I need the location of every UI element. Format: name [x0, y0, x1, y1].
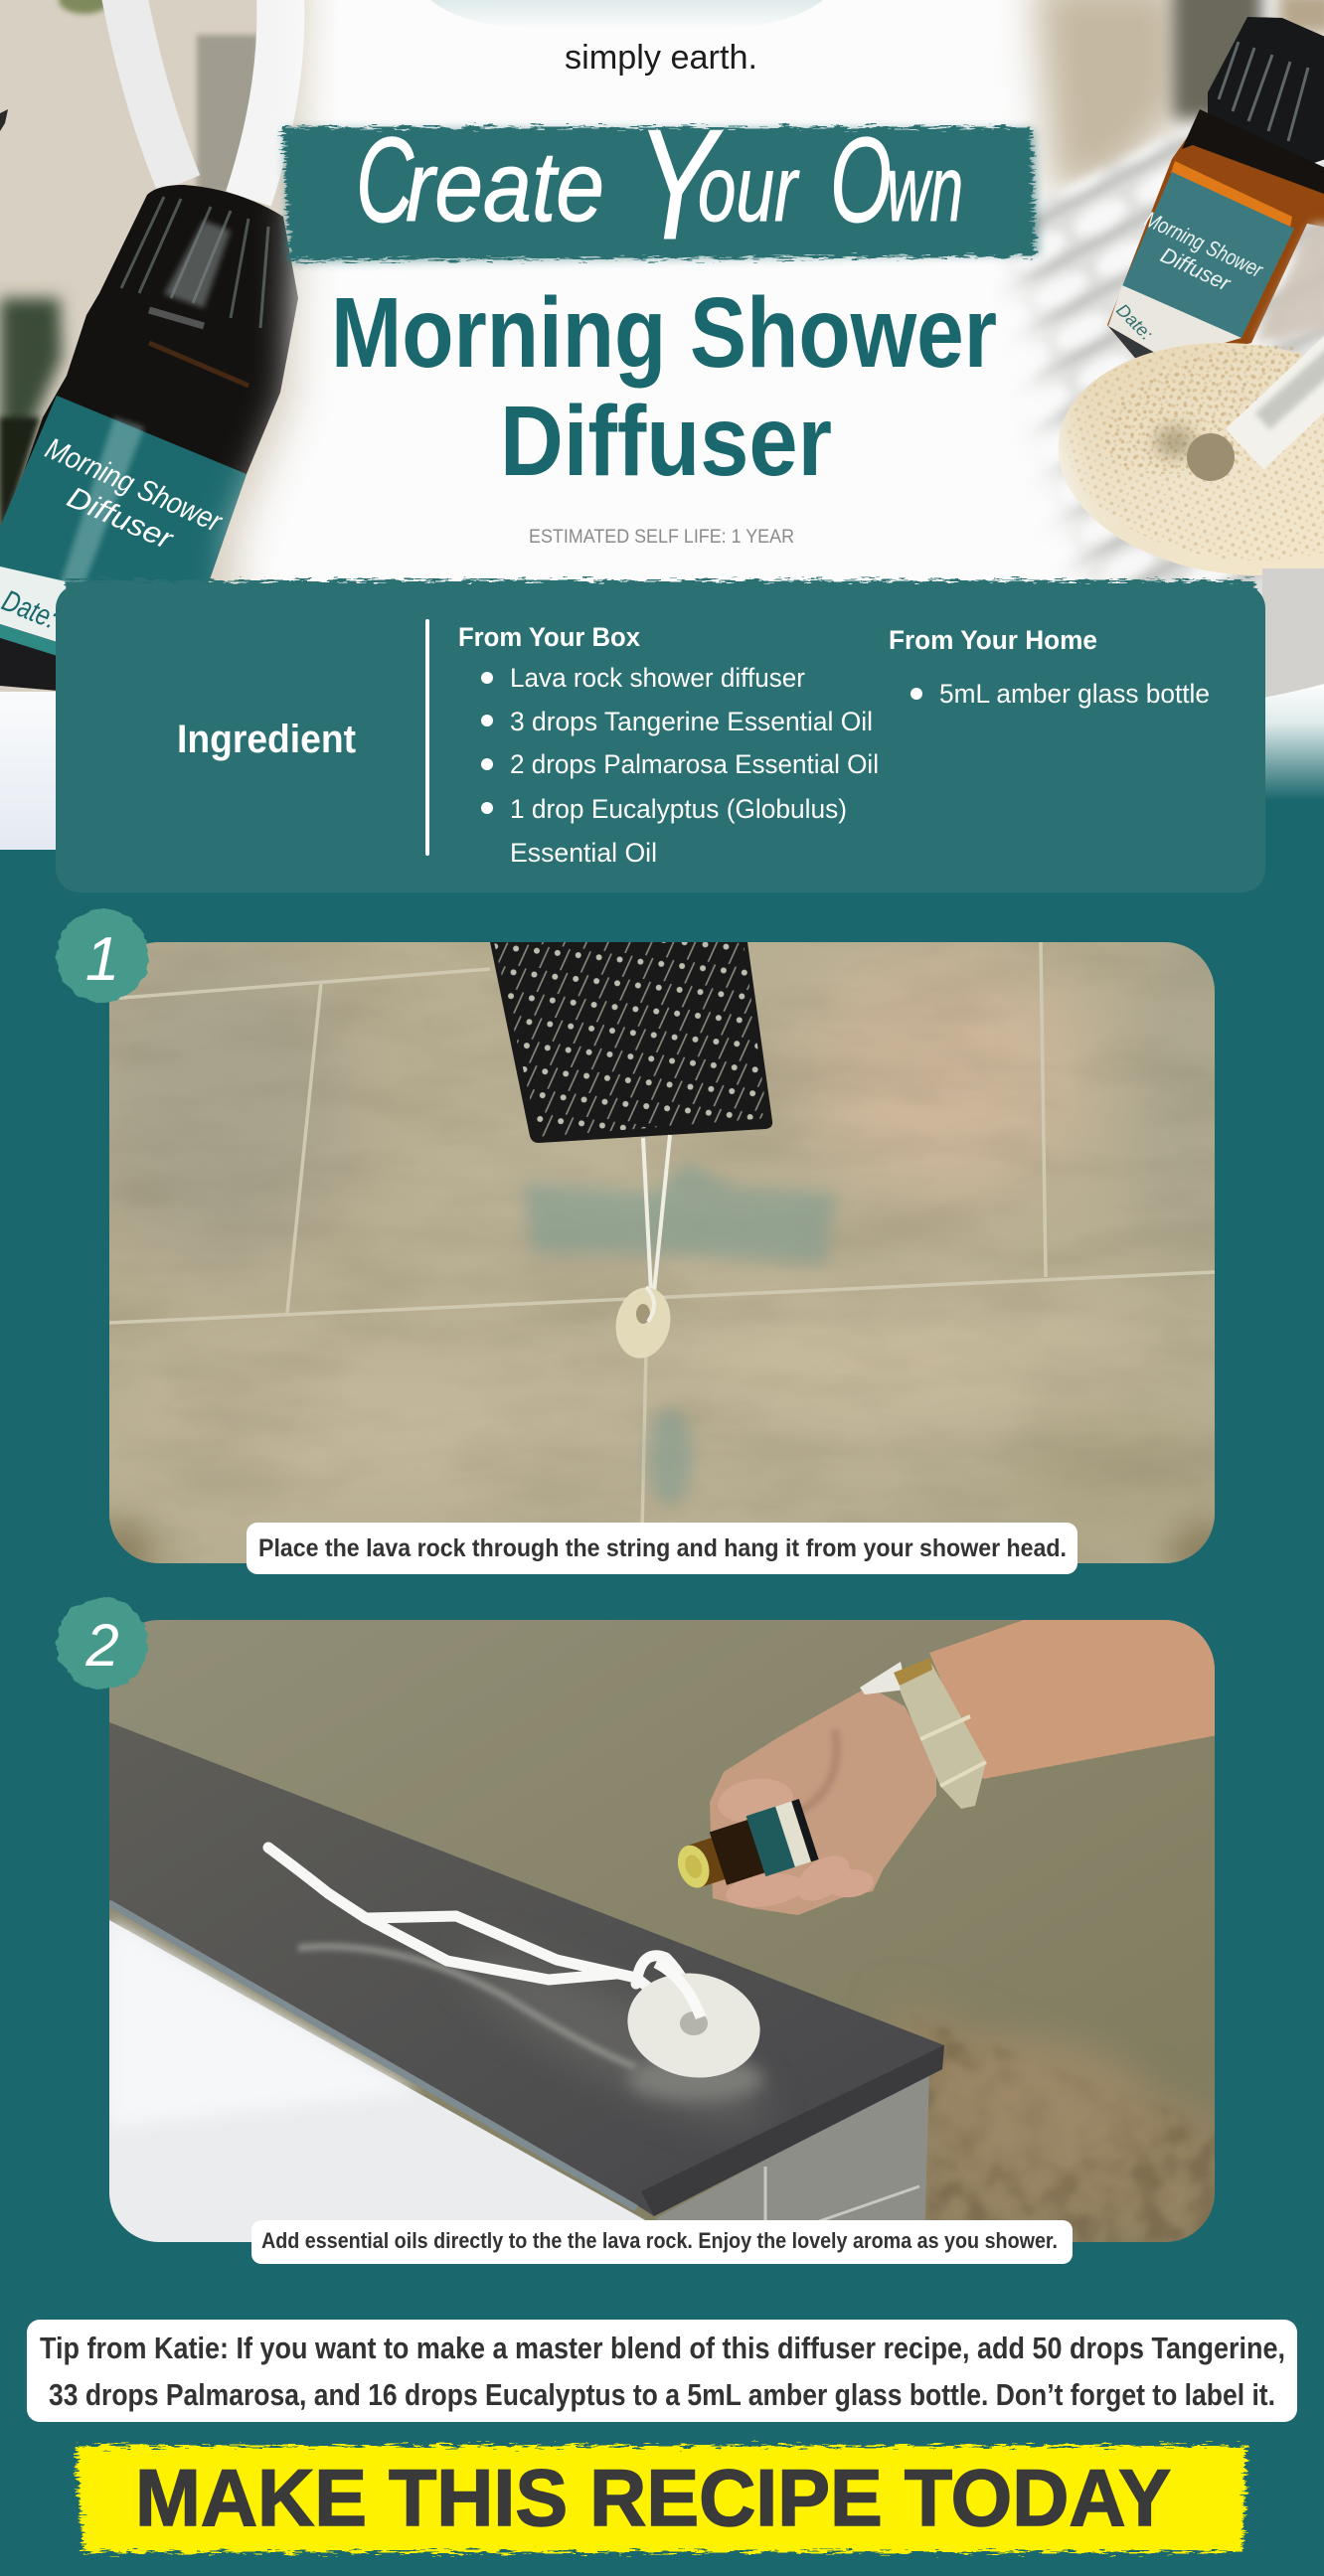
- black neck collar: [1182, 109, 1324, 197]
- logo: simply earth: simply earth.: [565, 39, 757, 77]
- white centre fade: [239, 0, 1113, 656]
- vertical divider: [425, 619, 429, 856]
- list: from your home: [889, 625, 1210, 709]
- brush banner: [282, 127, 1040, 262]
- step 2 caption: [251, 2220, 1073, 2264]
- photo: white rope left: [124, 0, 179, 184]
- item 4: Essential Oil: [510, 838, 657, 868]
- subheading: From Your Box: [458, 622, 640, 652]
- item 3: 2 drops Palmarosa Essential Oil: [510, 749, 879, 779]
- estimated shelf life note: ESTIMATED SELF LIFE: 1 YEAR: [529, 527, 794, 548]
- list: from your box: [458, 622, 879, 868]
- tile under counter: [656, 2072, 929, 2246]
- woven watch band: [898, 1660, 986, 1809]
- date text: Date:: [1112, 300, 1157, 344]
- knit towel: [944, 129, 1324, 725]
- rock reflection: [628, 2057, 763, 2101]
- bottle body dark glass: [0, 185, 298, 676]
- subheading: From Your Home: [889, 625, 1097, 655]
- title line 2: Diffuser: [500, 386, 832, 497]
- cap highlight: [164, 221, 231, 308]
- cap ribs: [1219, 42, 1308, 141]
- tile base: [109, 942, 1215, 1563]
- shower head shadow on wall: [524, 1163, 836, 1264]
- counter glossy highlight: [448, 1923, 784, 2152]
- rope reflection on counter: [298, 1947, 636, 2067]
- soft towel lower right: [1262, 568, 1324, 701]
- photo: dark plant shade lower: [0, 417, 40, 542]
- word: O: O: [830, 112, 892, 247]
- icon: dark speck at left edge: [0, 109, 8, 131]
- spray dots on shower head: [494, 942, 767, 1137]
- hanging string: [643, 1135, 670, 1292]
- bottle amber glass: [1107, 129, 1324, 370]
- denser pores on upper rock: [1087, 320, 1324, 499]
- tile grout lines: [109, 942, 1215, 1530]
- photo: blurred leaf at top: [59, 0, 110, 14]
- date band on label: [0, 566, 70, 646]
- counter lip: [109, 1903, 636, 2208]
- rope weave shade: [1262, 348, 1324, 421]
- teal bottle label: [0, 396, 247, 596]
- word: reate: reate: [406, 131, 604, 242]
- white watch strap: [860, 1662, 907, 1694]
- step 2 badge: 2: [84, 1612, 119, 1679]
- dark countertop: [109, 1722, 944, 2216]
- white bowl lower left: [0, 692, 70, 850]
- tip from Katie callout: [27, 2320, 1297, 2422]
- brighter panel top: [109, 1920, 417, 2127]
- step 1 caption: [247, 1523, 1077, 1574]
- item: 5mL amber glass bottle: [939, 679, 1210, 709]
- dark background top right: [1173, 0, 1262, 119]
- label script text: Morning Shower: [1141, 206, 1268, 283]
- hand: [710, 1687, 936, 1915]
- item 4: [481, 794, 847, 868]
- vase tan area: [1034, 0, 1183, 199]
- left essential oil bottle: [0, 185, 298, 692]
- word: our: our: [698, 136, 800, 241]
- top tinted arc: [430, 0, 823, 30]
- photo: dark shadow behind ropes: [197, 35, 258, 194]
- dark corners: [85, 928, 1241, 1589]
- panel background: [56, 584, 1265, 892]
- step 1 badge: [57, 909, 148, 1003]
- tile grout under counter: [765, 2167, 919, 2246]
- step 1 badge: 1: [85, 925, 119, 994]
- word: wn: wn: [887, 136, 963, 241]
- photo: blurred green plant: [0, 298, 62, 557]
- header bottom fill beneath bowl: [1257, 799, 1324, 859]
- shower head: [490, 942, 772, 1143]
- warm glow behind bottle: [1254, 224, 1324, 343]
- title: Morning Shower Diffuser: [331, 277, 997, 497]
- heading script: Create Your Own: [356, 97, 963, 272]
- photo: white base behind centre and right: [338, 0, 1324, 280]
- teal strip under date band: [0, 624, 70, 660]
- amber glints: [149, 343, 248, 386]
- step 2 badge: [57, 1598, 148, 1690]
- tile tone variations: [89, 914, 1233, 1550]
- rock hole: [1187, 433, 1235, 481]
- item 2: 3 drops Tangerine Essential Oil: [510, 707, 873, 736]
- white bowl rim lower right: [1257, 682, 1324, 800]
- teal label: [1122, 172, 1294, 338]
- watch band keepers: [920, 1716, 986, 1786]
- item 1: Lava rock shower diffuser: [510, 663, 805, 693]
- heading: Ingredient: Ingredient: [177, 718, 356, 761]
- step 1 caption: Place the lava rock through the string and hang it from your shower head.: [258, 1534, 1067, 1562]
- date band: [1108, 285, 1241, 360]
- lava rock in header: [1047, 320, 1324, 593]
- panel rough top edge: [66, 580, 1255, 604]
- shadow at hole: [1155, 426, 1195, 458]
- title line 1: Morning Shower: [331, 277, 997, 389]
- pebble floor: [890, 1998, 1223, 2246]
- banner core: [282, 127, 1036, 260]
- lava rock hanging: [609, 1282, 677, 1364]
- step 2 caption: Add essential oils directly to the the lava rock. Enjoy the lovely aroma as you shower.: [261, 2228, 1058, 2253]
- banner soft fringe: [284, 129, 1040, 262]
- tan corner top right: [1277, 0, 1324, 35]
- black cap: [1208, 17, 1324, 169]
- gold buckle: [894, 1658, 932, 1686]
- small bottle held in hand: [670, 1799, 819, 1901]
- rock body: [1047, 325, 1324, 593]
- cap ribs: [121, 197, 268, 328]
- header photo collage: [0, 0, 1324, 859]
- step 1 photo: shower head with hanging lava rock: [85, 914, 1241, 1589]
- photo: beige wall backdrop left: [0, 0, 338, 696]
- label script text: [1130, 206, 1268, 306]
- bottle base: [1108, 326, 1167, 370]
- item 4: 1 drop Eucalyptus (Globulus): [510, 794, 847, 824]
- right essential oil bottle: [1107, 17, 1324, 370]
- wall base: [109, 1620, 1215, 2242]
- rock shadow on wall: [648, 1408, 692, 1504]
- label script text: Diffuser: [1157, 242, 1236, 296]
- word: C: C: [356, 112, 414, 247]
- flange highlight: [149, 310, 204, 326]
- base of bottle: [0, 638, 70, 692]
- photo: white rope right: [248, 0, 280, 199]
- rock pores: [1056, 327, 1324, 577]
- thumb: [715, 1774, 796, 1828]
- white panel below counter: [109, 1920, 656, 2246]
- right side textured background: [944, 0, 1324, 725]
- hand crease shadow: [795, 1729, 837, 1814]
- step 2 photo: adding oil to lava rock: [109, 1620, 1223, 2246]
- bright amber band: [1171, 161, 1292, 227]
- panel: ingredients: [56, 580, 1265, 892]
- call to action banner: MAKE THIS RECIPE TODAY: [135, 2454, 1171, 2543]
- label script text: Morning Shower: [41, 432, 227, 539]
- rope through rock: [1244, 356, 1324, 449]
- arm: [929, 1620, 1223, 1779]
- stone veining texture: [109, 942, 1215, 1563]
- fingers under bottle: [724, 1847, 875, 1911]
- label script text: Diffuser: [63, 481, 178, 557]
- counter front edge: [641, 2045, 944, 2216]
- white rope on counter: [268, 1848, 701, 2017]
- word: Y: Y: [636, 97, 723, 272]
- label light reflection: [60, 417, 144, 596]
- lava rock on counter: [619, 1963, 768, 2088]
